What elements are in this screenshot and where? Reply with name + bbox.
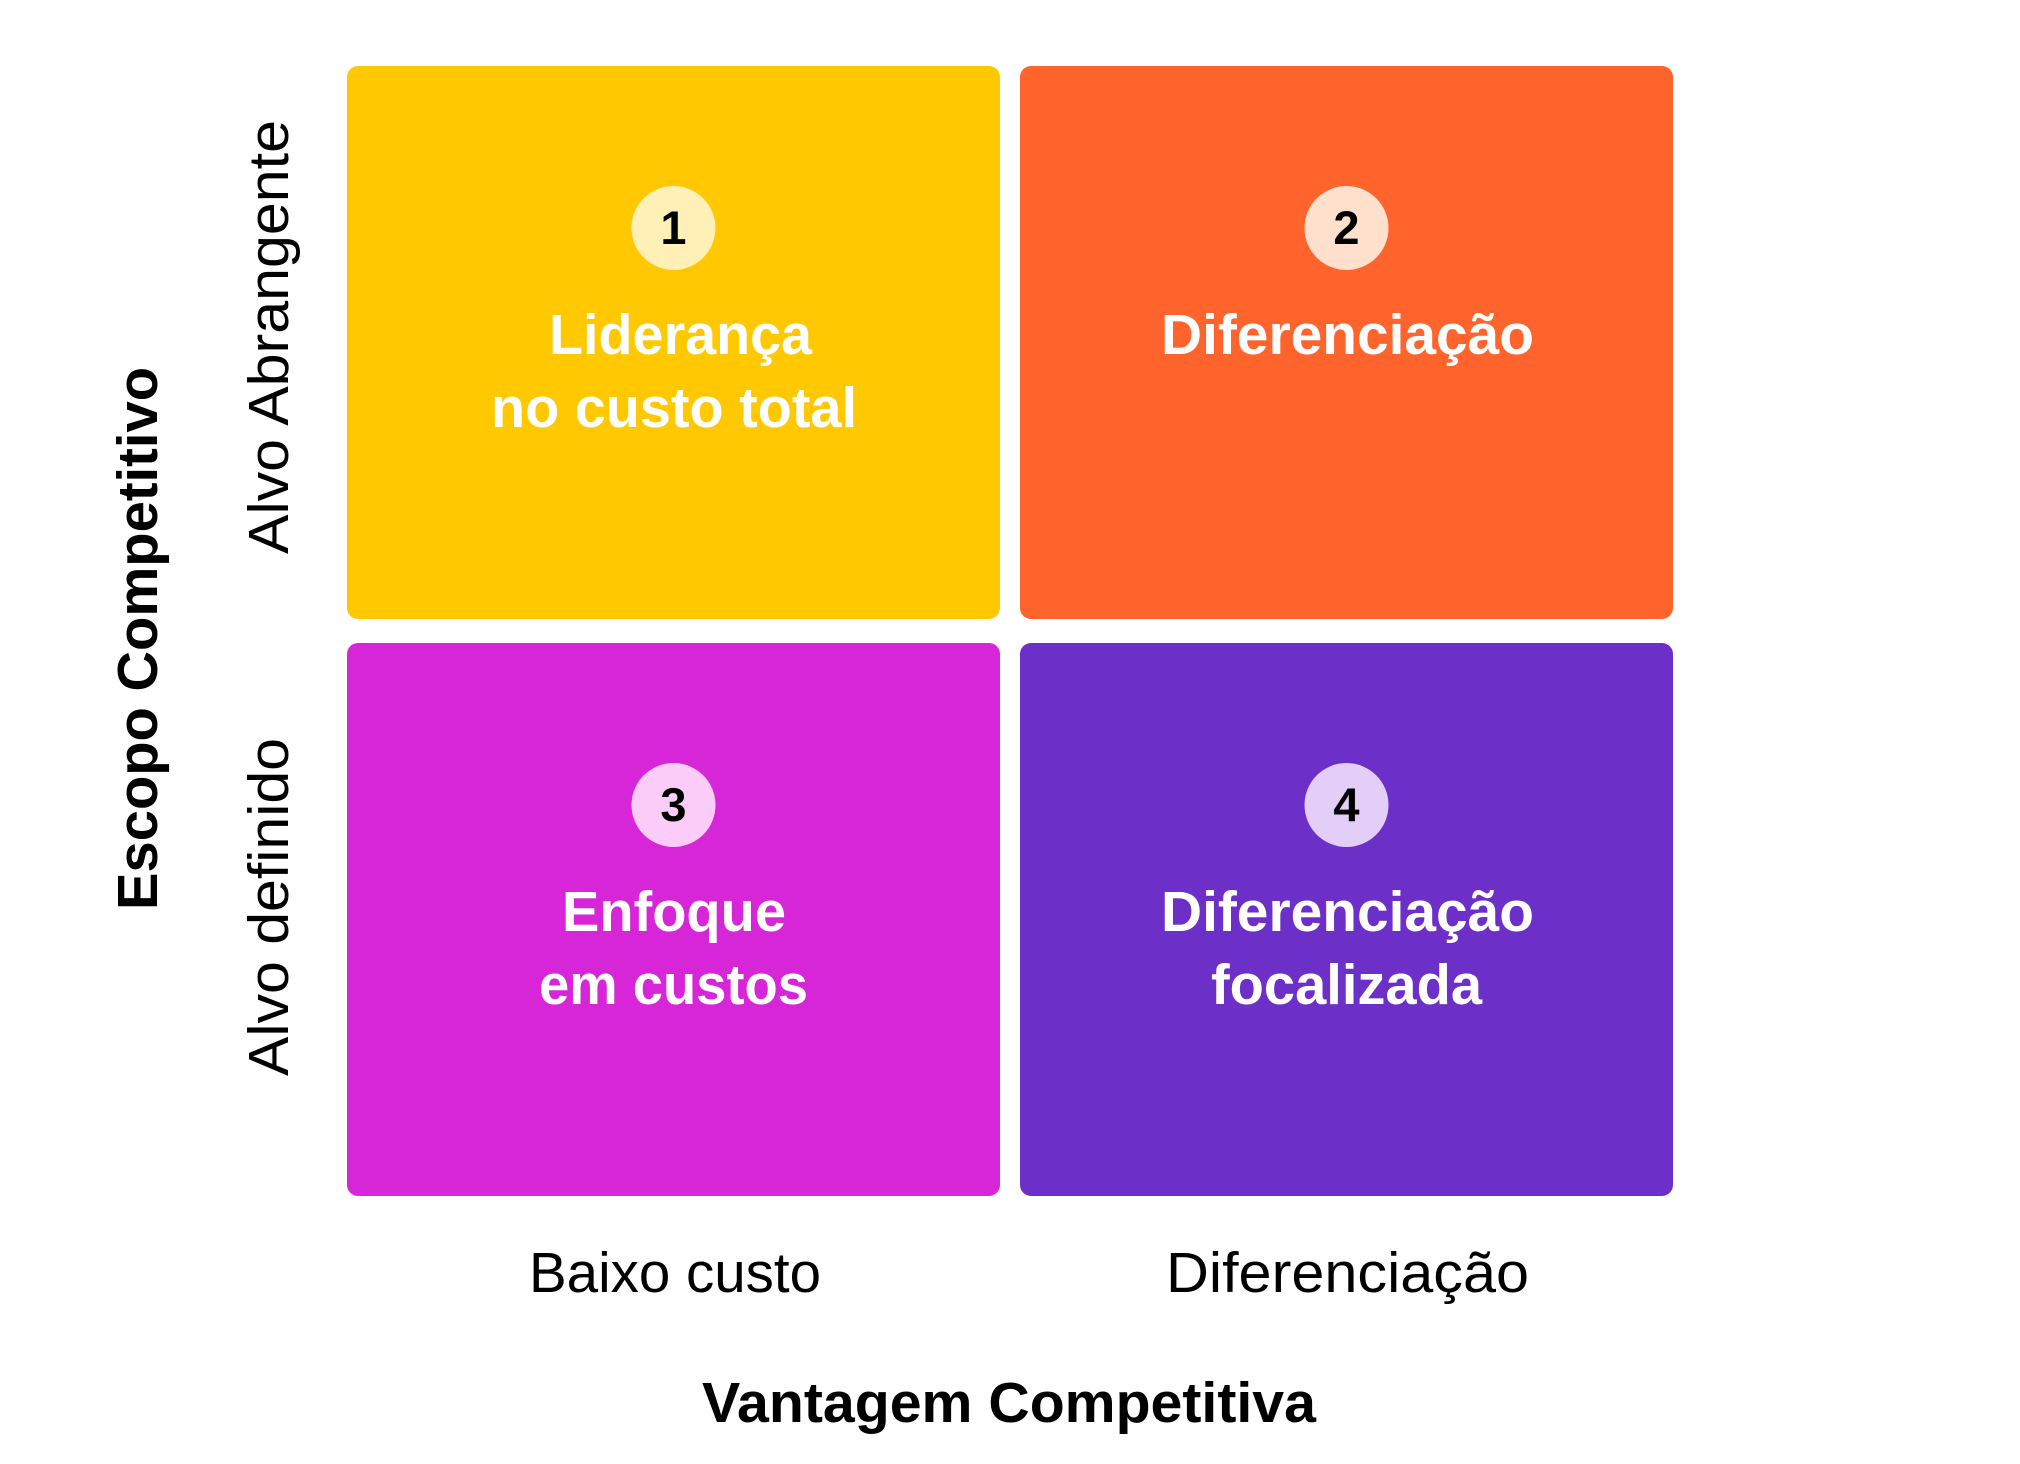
axis label: Diferenciação: Diferenciação — [1166, 1241, 1529, 1305]
heading: Liderança no custo total — [491, 303, 857, 440]
heading: Diferenciação focalizada — [1161, 880, 1534, 1017]
axis title: Vantagem Competitiva: Vantagem Competitiva — [702, 1371, 1317, 1435]
heading: Enfoque em custos: Enfoque — [562, 880, 786, 944]
axis title: Escopo Competitivo: Escopo Competitivo — [106, 367, 170, 910]
heading: Diferenciação focalizada: Diferenciação — [1161, 880, 1534, 944]
panel: Liderança no custo total — [347, 66, 1000, 619]
axis label: Alvo definido: Alvo definido — [237, 738, 301, 1076]
icon: number 3 badge — [632, 763, 716, 847]
icon: number 4 badge: 4 — [1333, 778, 1360, 831]
panel: Diferenciação — [1020, 66, 1673, 619]
heading: Liderança no custo total: Liderança — [549, 303, 813, 367]
heading: Enfoque em custos — [539, 880, 808, 1017]
axis label: Alvo Abrangente: Alvo Abrangente — [237, 120, 301, 554]
panel: Enfoque em custos — [347, 643, 1000, 1196]
axis label: Baixo custo: Baixo custo — [529, 1241, 821, 1305]
panel: Diferenciação focalizada — [1020, 643, 1673, 1196]
icon: number 3 badge: 3 — [660, 778, 687, 831]
heading: Diferenciação: Diferenciação — [1161, 303, 1534, 367]
heading: Diferenciação focalizada: focalizada — [1211, 953, 1483, 1017]
icon: number 2 badge — [1304, 186, 1388, 270]
icon: number 4 badge — [1304, 763, 1388, 847]
heading: Enfoque em custos: em custos — [539, 953, 808, 1017]
icon: number 1 badge: 1 — [660, 201, 687, 254]
heading: Liderança no custo total: no custo total — [491, 376, 857, 440]
icon: number 2 badge: 2 — [1333, 201, 1360, 254]
icon: number 1 badge — [632, 186, 716, 270]
